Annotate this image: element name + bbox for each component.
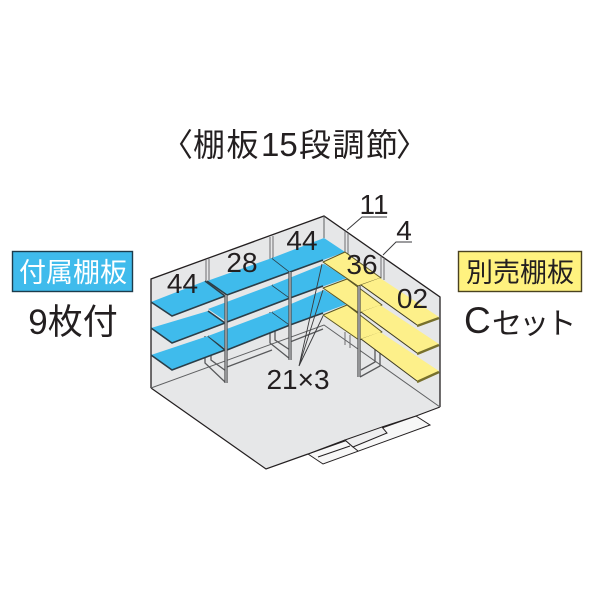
front post over shelves (357, 286, 361, 377)
leader line: 4 (383, 242, 412, 255)
shelf posts (226, 272, 290, 383)
leader lines: 21×3 (299, 264, 323, 366)
title: 〉 (396, 127, 428, 163)
dimension numbers: 28 (226, 247, 258, 278)
leader line: 11 (347, 217, 387, 230)
dimension numbers: 36 (346, 249, 378, 280)
title (161, 126, 428, 163)
title: 棚板 (193, 127, 260, 163)
blue shelves (middle bay) (207, 258, 290, 350)
dimension numbers: 21×3 (266, 364, 330, 395)
dimension numbers (167, 189, 428, 395)
blue shelves (right bay) (272, 238, 347, 325)
dimension numbers: 44 (167, 268, 198, 299)
title: 〈 (161, 127, 193, 163)
badge: optional shelves (458, 252, 582, 292)
label: 9 shelves included: 9枚付 (28, 303, 118, 342)
door threshold (308, 416, 430, 464)
dimension numbers: 4 (396, 215, 412, 246)
badge: optional shelves: 別売棚板 (466, 258, 574, 288)
badge: included shelves (12, 252, 132, 292)
back frames (205, 312, 380, 382)
title: 15 (261, 126, 298, 163)
title: 段調節 (299, 127, 400, 163)
label: C set: セット (492, 308, 574, 341)
yellow shelves (323, 252, 439, 382)
dimension numbers: 44 (286, 225, 318, 256)
blue shelves (left bay) (151, 281, 225, 370)
label: C set: C (464, 300, 491, 341)
walls and floor (151, 216, 440, 469)
badge: included shelves: 付属棚板 (19, 258, 127, 288)
label: C set (464, 300, 574, 341)
shed diagram (151, 189, 440, 469)
dimension numbers: 11 (359, 189, 389, 220)
dimension numbers: 02 (397, 283, 428, 314)
